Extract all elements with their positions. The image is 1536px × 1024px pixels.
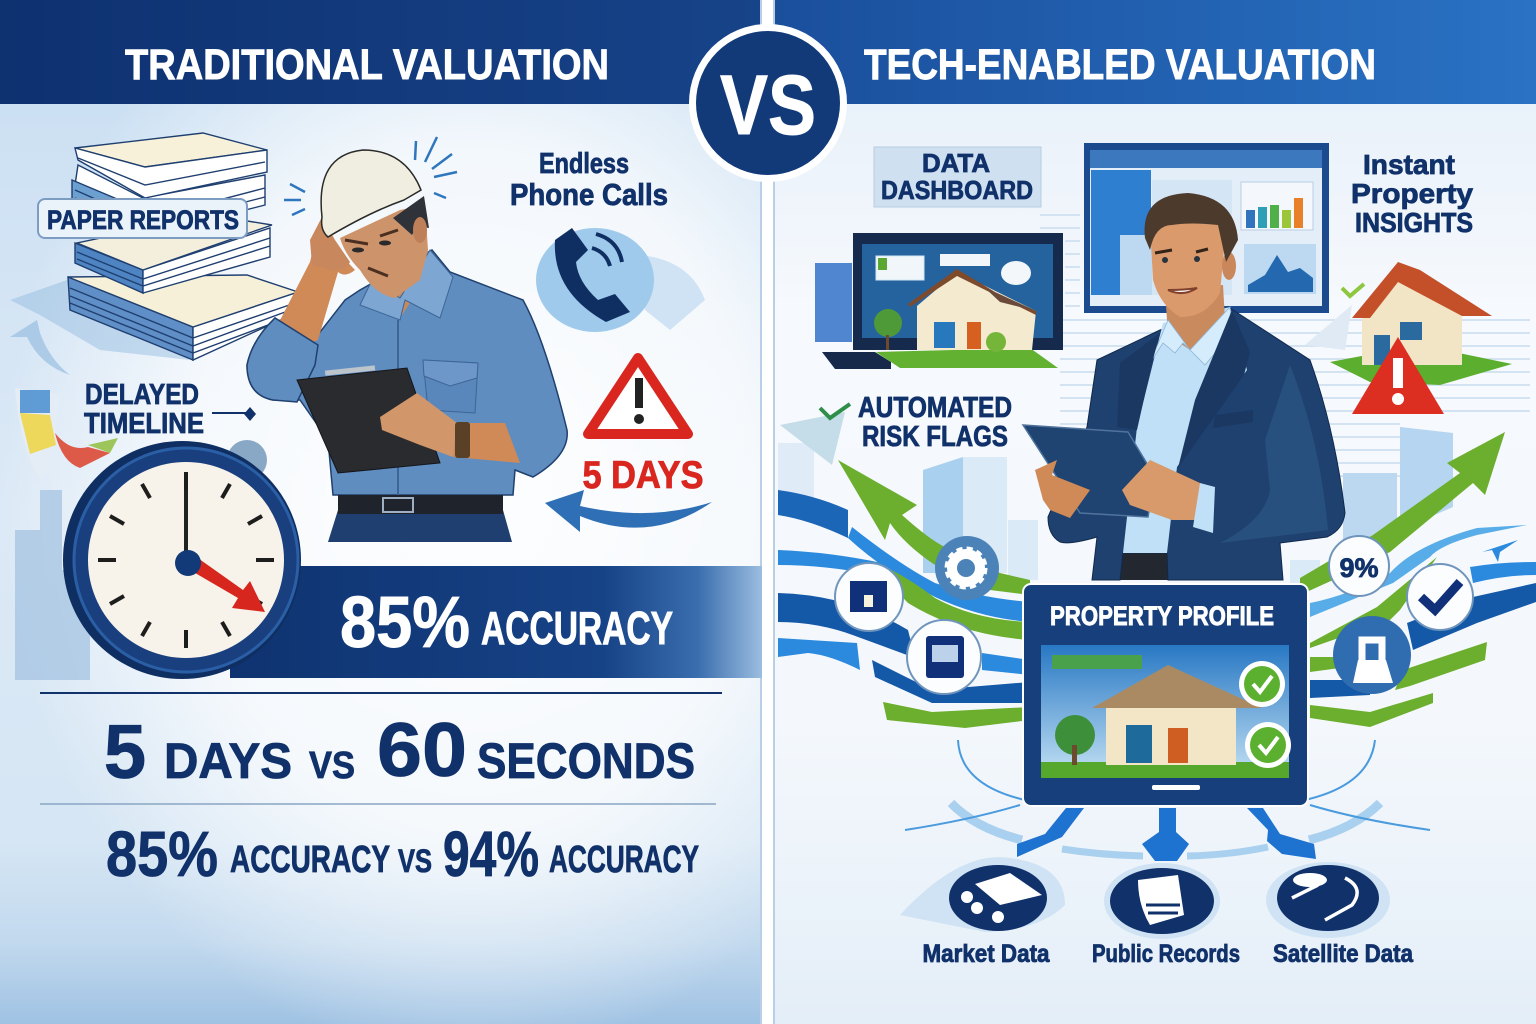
label: delayed timeline: DELAYED (85, 379, 199, 411)
icon: lock badge (1333, 616, 1411, 694)
icon: phone (536, 228, 705, 332)
icon: toolbox badge (835, 563, 903, 631)
vs badge: VS (720, 58, 816, 152)
label: instant property insights (1351, 149, 1473, 238)
data arcs (905, 740, 1430, 856)
hand on head (310, 217, 350, 270)
tablet (1023, 425, 1155, 517)
icon circles right: 9% (1339, 553, 1379, 583)
hair (1145, 193, 1238, 262)
stat: days vs seconds: 5 (104, 710, 146, 795)
face (340, 205, 428, 298)
icon: clock (63, 440, 301, 679)
accuracy band: ACCURACY (481, 602, 673, 654)
paper stack shadow (10, 280, 190, 360)
icon: satellite data (1266, 862, 1390, 938)
arrow: green right (1300, 432, 1505, 595)
suit (1048, 308, 1345, 580)
label: data dashboard: DATA (922, 148, 990, 178)
header: tech-enabled valuation: TECH-ENABLED VALUATION (864, 41, 1376, 89)
arrow: curved return (545, 490, 712, 532)
businessman (1023, 193, 1345, 580)
label: automated risk flags: RISK FLAGS (862, 421, 1008, 453)
label: delayed timeline (84, 379, 204, 440)
face (1150, 215, 1224, 317)
label: endless phone calls (510, 148, 668, 212)
icon circles right (1329, 536, 1473, 694)
stat: days vs seconds: SECONDS (477, 733, 695, 789)
label: endless phone calls: Phone Calls (510, 177, 668, 212)
property profile tablet: PROPERTY PROFILE (1050, 601, 1274, 631)
shirt (247, 250, 567, 495)
accuracy band (230, 566, 762, 678)
belt (338, 495, 503, 514)
collar (360, 250, 453, 320)
stat: accuracy comparison: ACCURACY (549, 839, 699, 881)
stat: accuracy comparison (106, 818, 699, 890)
icon: paper plane and check (1305, 284, 1364, 350)
vs badge (689, 24, 847, 182)
label: instant property insights: Instant (1363, 149, 1455, 180)
icon: monitor with house (815, 233, 1063, 369)
stats divider (40, 692, 722, 694)
skyline: right (778, 427, 1453, 584)
header: tech-enabled valuation (775, 0, 1536, 104)
neck (1165, 285, 1225, 350)
icon: warning triangle (588, 358, 688, 434)
stat: days vs seconds: 60 (377, 708, 467, 793)
label: satellite data: Satellite Data (1273, 940, 1414, 968)
label: 5 days: 5 DAYS (582, 454, 704, 497)
label: data dashboard (874, 147, 1041, 207)
stat: days vs seconds: DAYS (164, 733, 292, 789)
label: endless phone calls: Endless (539, 148, 629, 180)
timeline connector (212, 407, 256, 421)
raised forearm (275, 235, 355, 343)
lapels (1117, 333, 1160, 430)
shirt (1123, 307, 1247, 553)
icon: calendar badge (907, 620, 981, 694)
panel: traditional background (0, 0, 760, 1024)
sleeve highlight (1220, 365, 1328, 543)
label: data dashboard: DASHBOARD (881, 175, 1033, 205)
stat: accuracy comparison: 94% (443, 818, 539, 890)
stat: accuracy comparison: ACCURACY (230, 839, 390, 881)
icon: paper stack (68, 133, 298, 360)
label: paper reports (38, 199, 247, 238)
icon: public records (1104, 863, 1220, 939)
label: automated risk flags: AUTOMATED (858, 392, 1012, 424)
icon: check badge (1407, 564, 1473, 630)
icon: mini chart (15, 388, 118, 478)
stat: accuracy comparison: 85% (106, 818, 218, 890)
label: instant property insights: INSIGHTS (1355, 207, 1473, 238)
neck (385, 240, 432, 318)
icon: green check flag (780, 404, 850, 465)
icon: percent badge (1329, 536, 1389, 596)
icon: warning triangle right (1352, 337, 1444, 414)
panel: tech-enabled background (775, 0, 1536, 1024)
icon: large dashboard screen (1084, 143, 1329, 313)
arrows: data into profile (1017, 808, 1316, 861)
stat: accuracy comparison: VS (398, 843, 432, 879)
clipboard (297, 368, 440, 473)
label: market data: Market Data (922, 940, 1050, 968)
flow ribbons right (1310, 525, 1536, 727)
label: paper reports: PAPER REPORTS (47, 205, 239, 235)
header: traditional valuation: TRADITIONAL VALUATION (125, 41, 609, 89)
hands (1035, 460, 1090, 518)
label: automated risk flags (858, 392, 1012, 453)
label: delayed timeline: TIMELINE (84, 408, 204, 440)
accuracy band: 85% (340, 583, 470, 663)
pocket (423, 360, 478, 413)
property profile tablet (1023, 584, 1308, 806)
icon: gear badge (935, 536, 999, 600)
arrow: green left (838, 460, 1030, 595)
icon: house (1330, 262, 1512, 385)
flow ribbons left (778, 490, 1030, 728)
label: instant property insights: Property (1351, 178, 1473, 209)
collar (1150, 307, 1232, 365)
icon: stress marks (284, 137, 457, 215)
skyline (15, 490, 90, 680)
trousers (328, 510, 512, 542)
stat: days vs seconds: VS (309, 745, 355, 787)
icon: market data (900, 857, 1065, 932)
icon circles left (835, 536, 999, 694)
header: traditional valuation (0, 0, 760, 104)
label: public records: Public Records (1092, 940, 1240, 968)
hard hat (321, 150, 421, 237)
stat: days vs seconds (104, 708, 695, 795)
worker figure (247, 150, 567, 542)
arrow: faded curved (10, 320, 70, 375)
forearm and hand (453, 423, 520, 463)
trousers (1120, 553, 1168, 580)
